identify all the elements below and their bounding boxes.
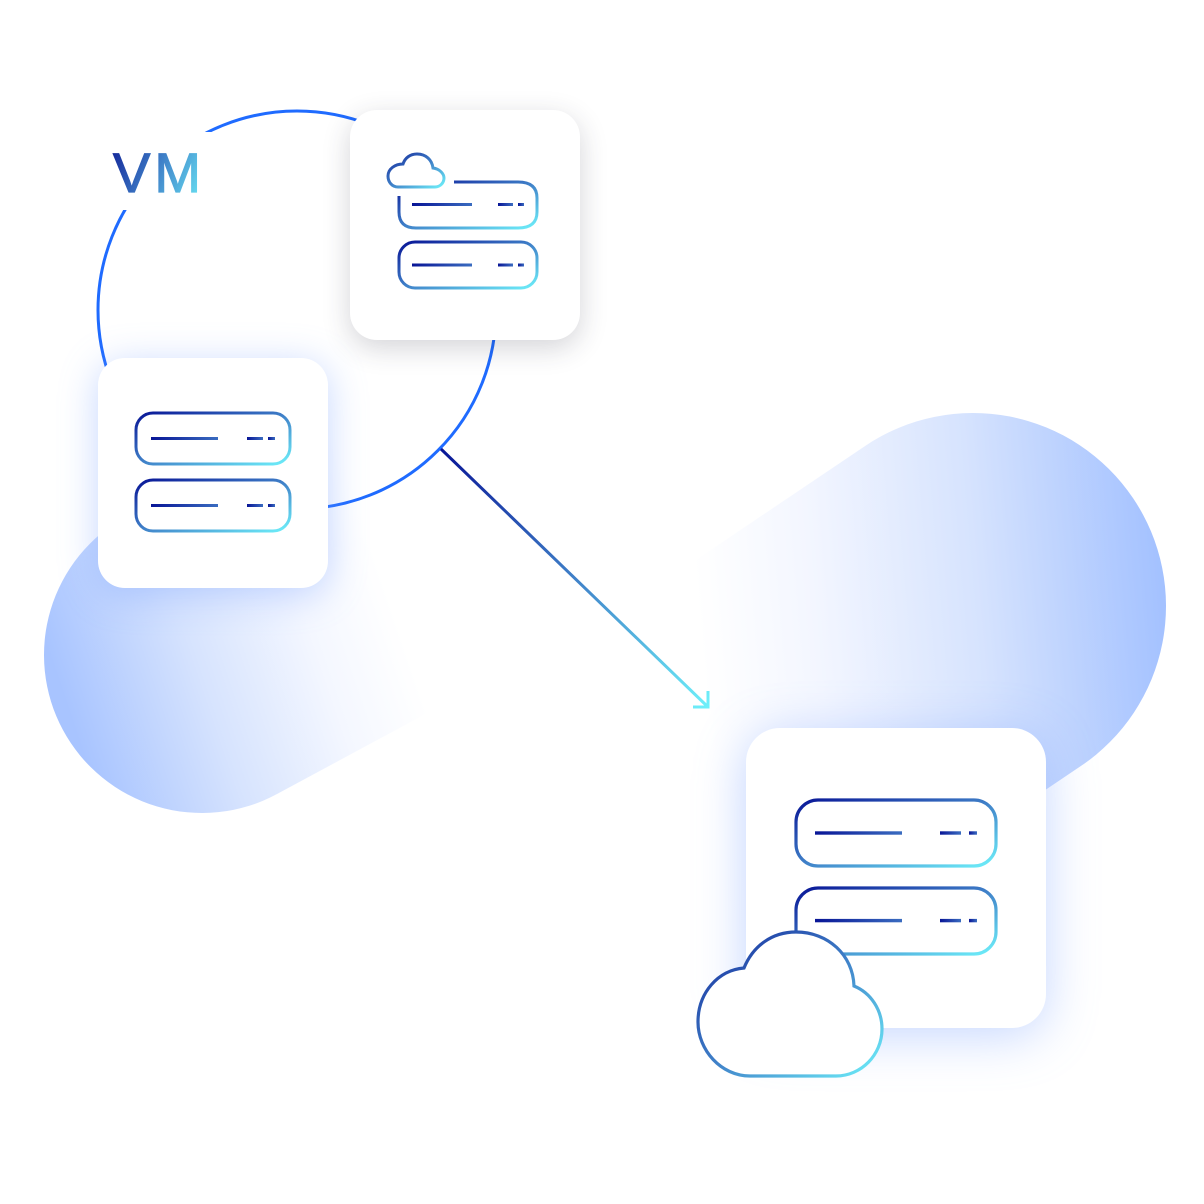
- icon: upper server row: [136, 413, 290, 464]
- card: server left: [98, 358, 328, 588]
- icon: lower server row: [136, 480, 290, 531]
- icon: upper server row: [796, 800, 996, 866]
- VM label: VM: [113, 141, 205, 204]
- icon: upper server row: [399, 182, 537, 228]
- icon: lower server row: [399, 242, 537, 288]
- card: server right: [746, 728, 1046, 1028]
- icon: lower server row: [796, 888, 996, 954]
- icon: small cloud: [388, 154, 444, 187]
- card: cloud server: [350, 110, 580, 340]
